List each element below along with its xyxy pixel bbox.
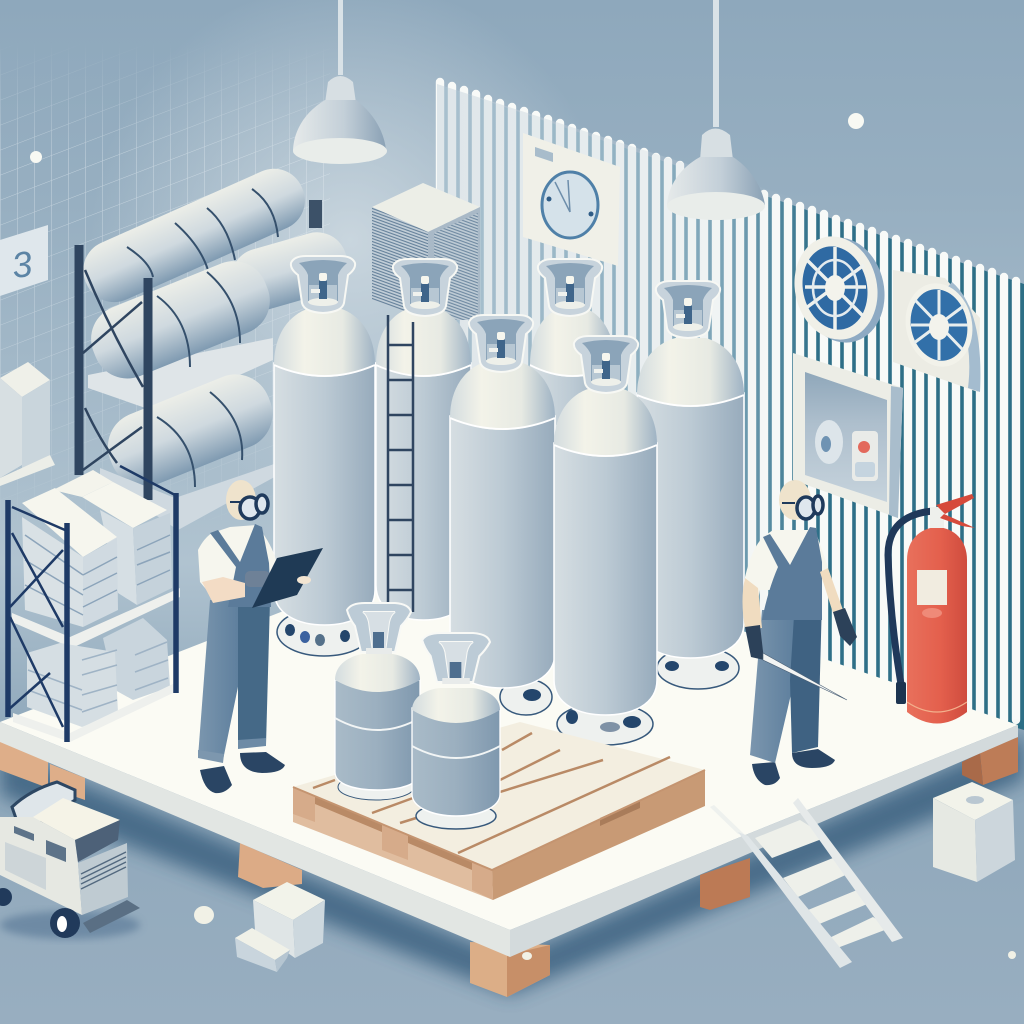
overalls trousers: [198, 600, 270, 763]
numbered sign: 3: [9, 243, 35, 286]
cylinder base first: [277, 608, 371, 656]
goggles: [782, 496, 823, 519]
wooden pallet: [293, 722, 705, 900]
hanging lamp right: [667, 0, 765, 220]
control panel box: [793, 353, 903, 518]
hanging lamp left: [293, 0, 387, 164]
alarm device: [815, 420, 843, 464]
cylinder middle: [450, 315, 555, 688]
overall straps and bib: [762, 527, 822, 620]
glove: [245, 571, 270, 587]
cylinder second: [376, 259, 471, 620]
cylinder middle base: [500, 679, 552, 715]
upper paper stacks: [22, 470, 172, 627]
floor box right: [933, 782, 1015, 882]
platform support feet: [0, 737, 1018, 997]
small cylinder right: [412, 633, 500, 829]
clock face: [542, 172, 598, 238]
white shirt: [745, 530, 828, 600]
worker with clipboard: [198, 480, 323, 793]
decorative light dots: [30, 113, 864, 163]
ventilation fan right: [893, 270, 980, 392]
inspection rod: [763, 653, 847, 700]
floor pebbles: [194, 906, 1016, 960]
gloves: [745, 608, 857, 660]
platform shadow on floor: [0, 735, 1024, 995]
cylinder first: [274, 256, 375, 625]
tiled grid wall: [0, 62, 330, 482]
upper shelf: [12, 588, 180, 648]
access steps: [710, 798, 903, 968]
arms: [742, 568, 843, 628]
lower paper stacks: [27, 618, 170, 727]
rack frame: [8, 493, 176, 742]
emergency switch: [852, 431, 878, 481]
cylinder rear right: [637, 281, 744, 658]
ventilation fan left: [785, 229, 894, 351]
small boxes on floor: [235, 882, 325, 972]
stacked box left edge: [0, 362, 55, 486]
wall ladder: [388, 315, 413, 612]
horizontal stored cylinders and back rack: [74, 159, 355, 530]
arm: [202, 577, 245, 603]
lower shelf pallet: [13, 683, 175, 742]
head: [226, 480, 256, 520]
clipboard: [252, 548, 323, 608]
worker with tool: [742, 480, 857, 785]
air handling unit: [372, 183, 480, 320]
overall straps and bib: [210, 524, 271, 607]
front storage rack with boxes: [8, 466, 180, 742]
overalls legs: [750, 600, 822, 763]
clock panel: [523, 133, 620, 266]
white shirt: [198, 525, 276, 600]
fire extinguisher: [888, 494, 975, 724]
safety goggles: [230, 495, 268, 519]
shoes: [752, 749, 835, 785]
head: [779, 480, 811, 520]
utility cart: [0, 782, 140, 939]
cylinder front: [554, 336, 657, 715]
ribbed wall: [437, 82, 1024, 730]
cylinder rear right base: [657, 647, 739, 689]
numbered sign: [0, 225, 48, 296]
platform: [0, 538, 1018, 957]
cylinder back centre: [530, 259, 615, 425]
small cylinder left: [335, 603, 420, 800]
shoes: [200, 752, 285, 793]
cylinder front base: [557, 703, 653, 745]
